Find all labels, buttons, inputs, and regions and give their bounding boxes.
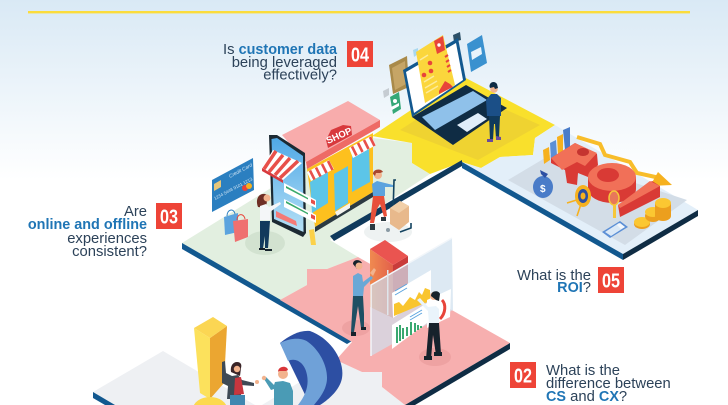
icon: target [567, 185, 591, 216]
text: question 05 line 1: What is the [517, 268, 591, 284]
callout: question 05: ROI? [557, 280, 591, 296]
panel: 03 green platform [182, 138, 430, 344]
top rule [28, 11, 690, 13]
icon: money bag: $ [540, 184, 546, 195]
callout: question 02 [510, 362, 671, 405]
icon: coins [634, 198, 671, 229]
text art: O [588, 163, 636, 203]
number badge 05: 05 [602, 270, 620, 292]
panel: 01 grey platform [93, 351, 405, 405]
callout: question 04 [223, 41, 373, 84]
callout: question 03 [28, 203, 182, 260]
number badge 02: 02 [514, 366, 532, 388]
figure: man at charts [417, 291, 451, 366]
callout: question 05 [517, 267, 624, 296]
callout: question 04: effectively? [263, 68, 337, 84]
callout: question 04: being leveraged [232, 55, 337, 71]
callout: question 02: CS and CX? [546, 389, 627, 405]
callout: question 02: difference between [546, 376, 671, 392]
figure: woman talking [222, 361, 259, 405]
icon: growth arrow [577, 137, 672, 186]
chart: bar chart card [392, 303, 427, 349]
text art: R [551, 143, 598, 185]
panel: 05 ROI platform [462, 125, 698, 260]
chart: ROI bars [543, 127, 570, 164]
illustration: laptop and documents [383, 32, 507, 145]
callout: question 03: online and offline [28, 217, 147, 233]
illustration: ROI letters and items [533, 127, 672, 238]
panel: 02 pink platform [280, 257, 510, 405]
icon: credit card: Credit Card [228, 162, 254, 180]
icon: store awnings [307, 136, 376, 181]
number badge 04: 04 [351, 44, 370, 66]
icon: exclamation mark [193, 317, 227, 405]
icon: calculator [602, 221, 628, 238]
icon: magnifier [609, 191, 619, 218]
icon: shopping bags [224, 210, 248, 242]
panel: 04 yellow platform [372, 76, 555, 174]
illustration: shop and phone [262, 101, 380, 245]
callout: question 03: experiences [67, 231, 147, 247]
figure: delivery man with cart [364, 170, 412, 242]
inner edge line [330, 160, 462, 241]
icon: shop sign: SHOP [325, 125, 354, 147]
icon: credit card [212, 158, 254, 212]
text art: I [618, 181, 660, 217]
figure: man at laptop [486, 82, 501, 142]
icon: credit card: 1234 5448 9101 1213 [213, 176, 254, 201]
chart: side card [427, 289, 451, 328]
text: question 02 line 1: What is the [546, 363, 620, 379]
text: question 04 line 1: Is customer data [223, 42, 338, 58]
illustration: analytics box, glass panel and charts [342, 238, 453, 366]
callout: question 03: consistent? [72, 244, 147, 260]
chart: area chart card [392, 270, 431, 318]
icon: question mark [280, 331, 342, 405]
text: question 03 line 1: Are [124, 204, 147, 220]
number badge 03: 03 [160, 206, 178, 228]
figure: man talking [262, 367, 293, 405]
figure: woman shopper [245, 194, 285, 255]
figure: woman presenter [342, 260, 376, 336]
